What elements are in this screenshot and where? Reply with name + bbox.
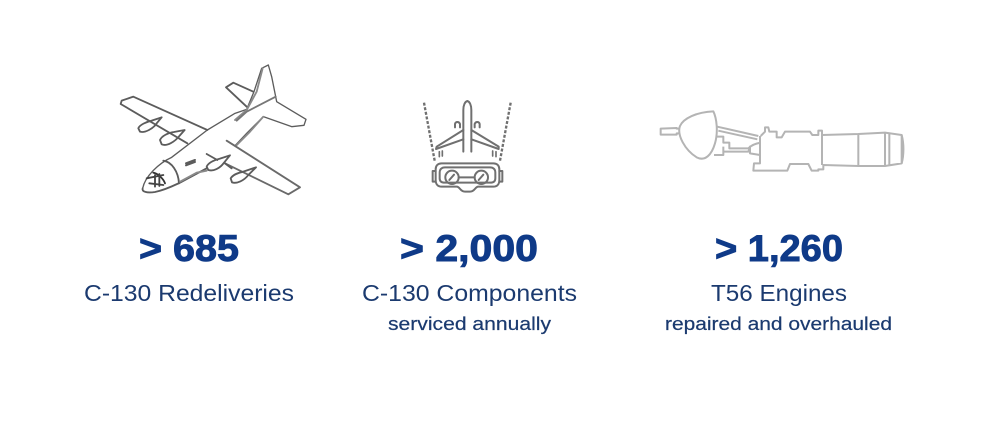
icon: aircraft scanned by VR headset xyxy=(424,101,511,192)
sublabel: repaired and overhauled: repaired and overhauled xyxy=(665,314,892,334)
sublabel: serviced annually: serviced annually xyxy=(388,314,551,334)
label: C-130 Components: C-130 Components xyxy=(362,280,577,306)
icon: T56 turboprop engine xyxy=(661,111,903,171)
label: T56 Engines: T56 Engines xyxy=(711,280,847,306)
panel: T56 engines xyxy=(661,111,903,334)
engines left wing xyxy=(138,117,162,132)
icon: C-130 aircraft xyxy=(121,65,306,194)
number: 685: > 685 xyxy=(139,228,239,269)
label: C-130 Redeliveries: C-130 Redeliveries xyxy=(84,280,294,306)
number: 2,000: > 2,000 xyxy=(400,228,538,269)
panel: C-130 components xyxy=(362,101,577,334)
panel: C-130 redeliveries xyxy=(84,65,306,306)
number: 1,260: > 1,260 xyxy=(715,228,843,269)
